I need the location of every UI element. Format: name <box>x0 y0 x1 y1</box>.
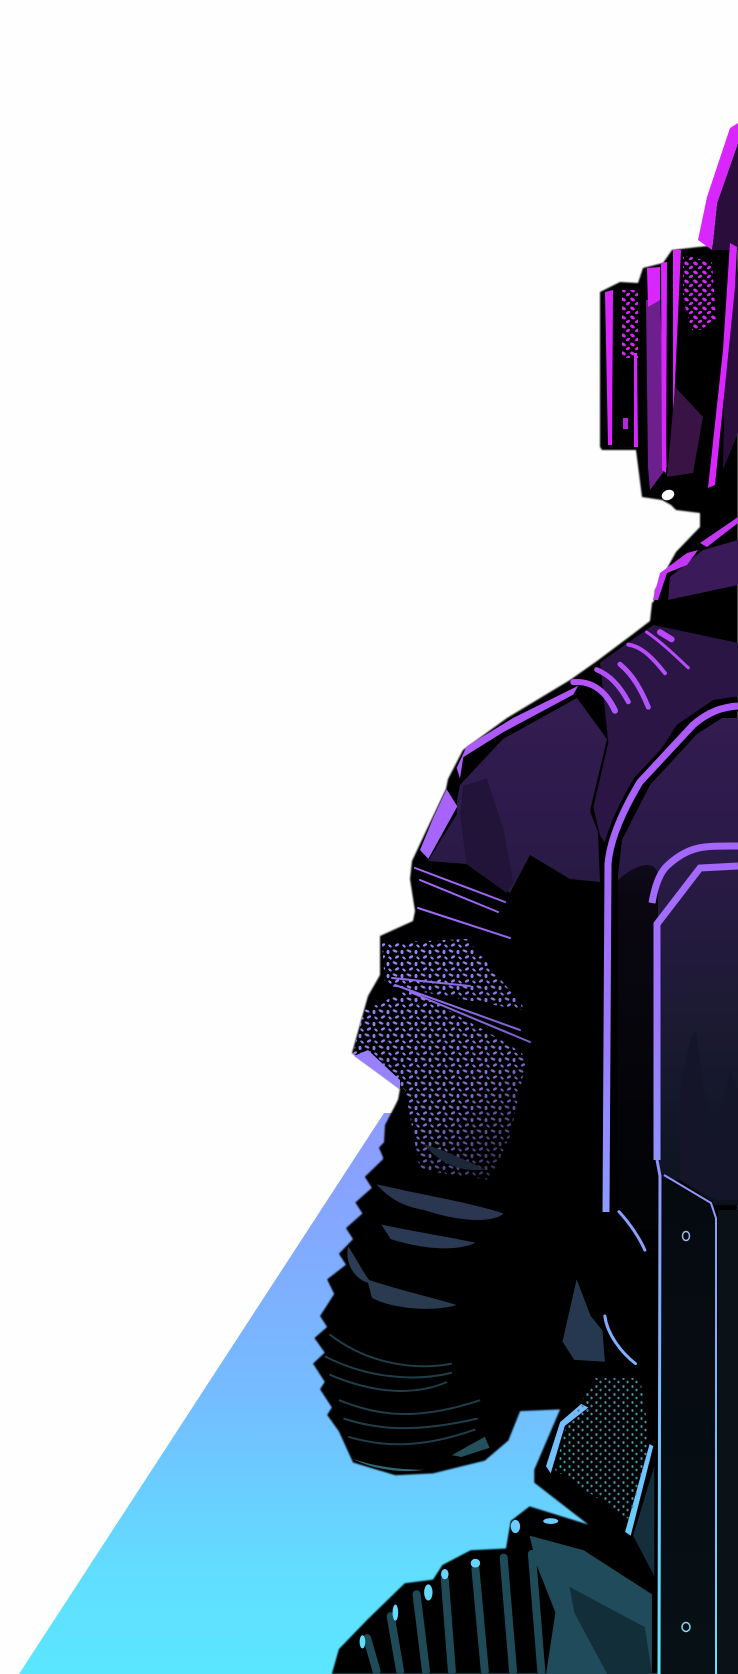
black silhouette <box>313 243 738 1674</box>
sleeve fold lines <box>325 1334 480 1444</box>
toe ridges <box>367 1554 541 1671</box>
inner highlight upper <box>652 846 738 903</box>
glove mesh <box>555 1378 650 1520</box>
hip plate <box>562 1279 605 1362</box>
shoulder and jacket <box>420 625 738 893</box>
panel side strip <box>618 865 658 1230</box>
visor blocks <box>605 243 738 490</box>
panel lower fill <box>660 1176 716 1674</box>
upper arm bands and mesh <box>353 868 530 1180</box>
hip highlight lines <box>605 1212 645 1364</box>
shin column <box>633 1466 654 1576</box>
sleeve folds <box>347 1144 504 1471</box>
shoulder highlight edge <box>457 686 578 779</box>
foot teal area <box>530 1536 652 1674</box>
gradient triangle <box>19 1113 738 1674</box>
panel inner fill <box>666 856 738 1205</box>
helmet sliver <box>698 123 738 250</box>
ear stud <box>660 488 676 502</box>
upper arm highlight <box>420 789 457 859</box>
cuff notch accent <box>354 1050 400 1089</box>
toe cyan gaps <box>360 1518 558 1648</box>
shoulder stripes <box>573 632 688 711</box>
rivet bottom <box>682 1622 690 1632</box>
panel fill upper <box>618 718 738 1180</box>
panel spike shade <box>680 1030 738 1200</box>
collar <box>653 517 738 600</box>
rivet top <box>682 1232 690 1240</box>
outer outline black <box>606 704 738 1212</box>
figure <box>313 123 738 1674</box>
arm band lines <box>392 868 530 1042</box>
panel far right fill <box>718 1210 738 1674</box>
outer highlight line <box>606 706 738 1212</box>
lower arm and foot <box>325 1144 654 1674</box>
inner highlight second <box>657 866 738 1160</box>
glove cyan edge <box>625 1444 653 1536</box>
backpack panel <box>606 704 738 1674</box>
inner line lower left <box>657 1160 660 1674</box>
inner line branch <box>664 1175 716 1674</box>
